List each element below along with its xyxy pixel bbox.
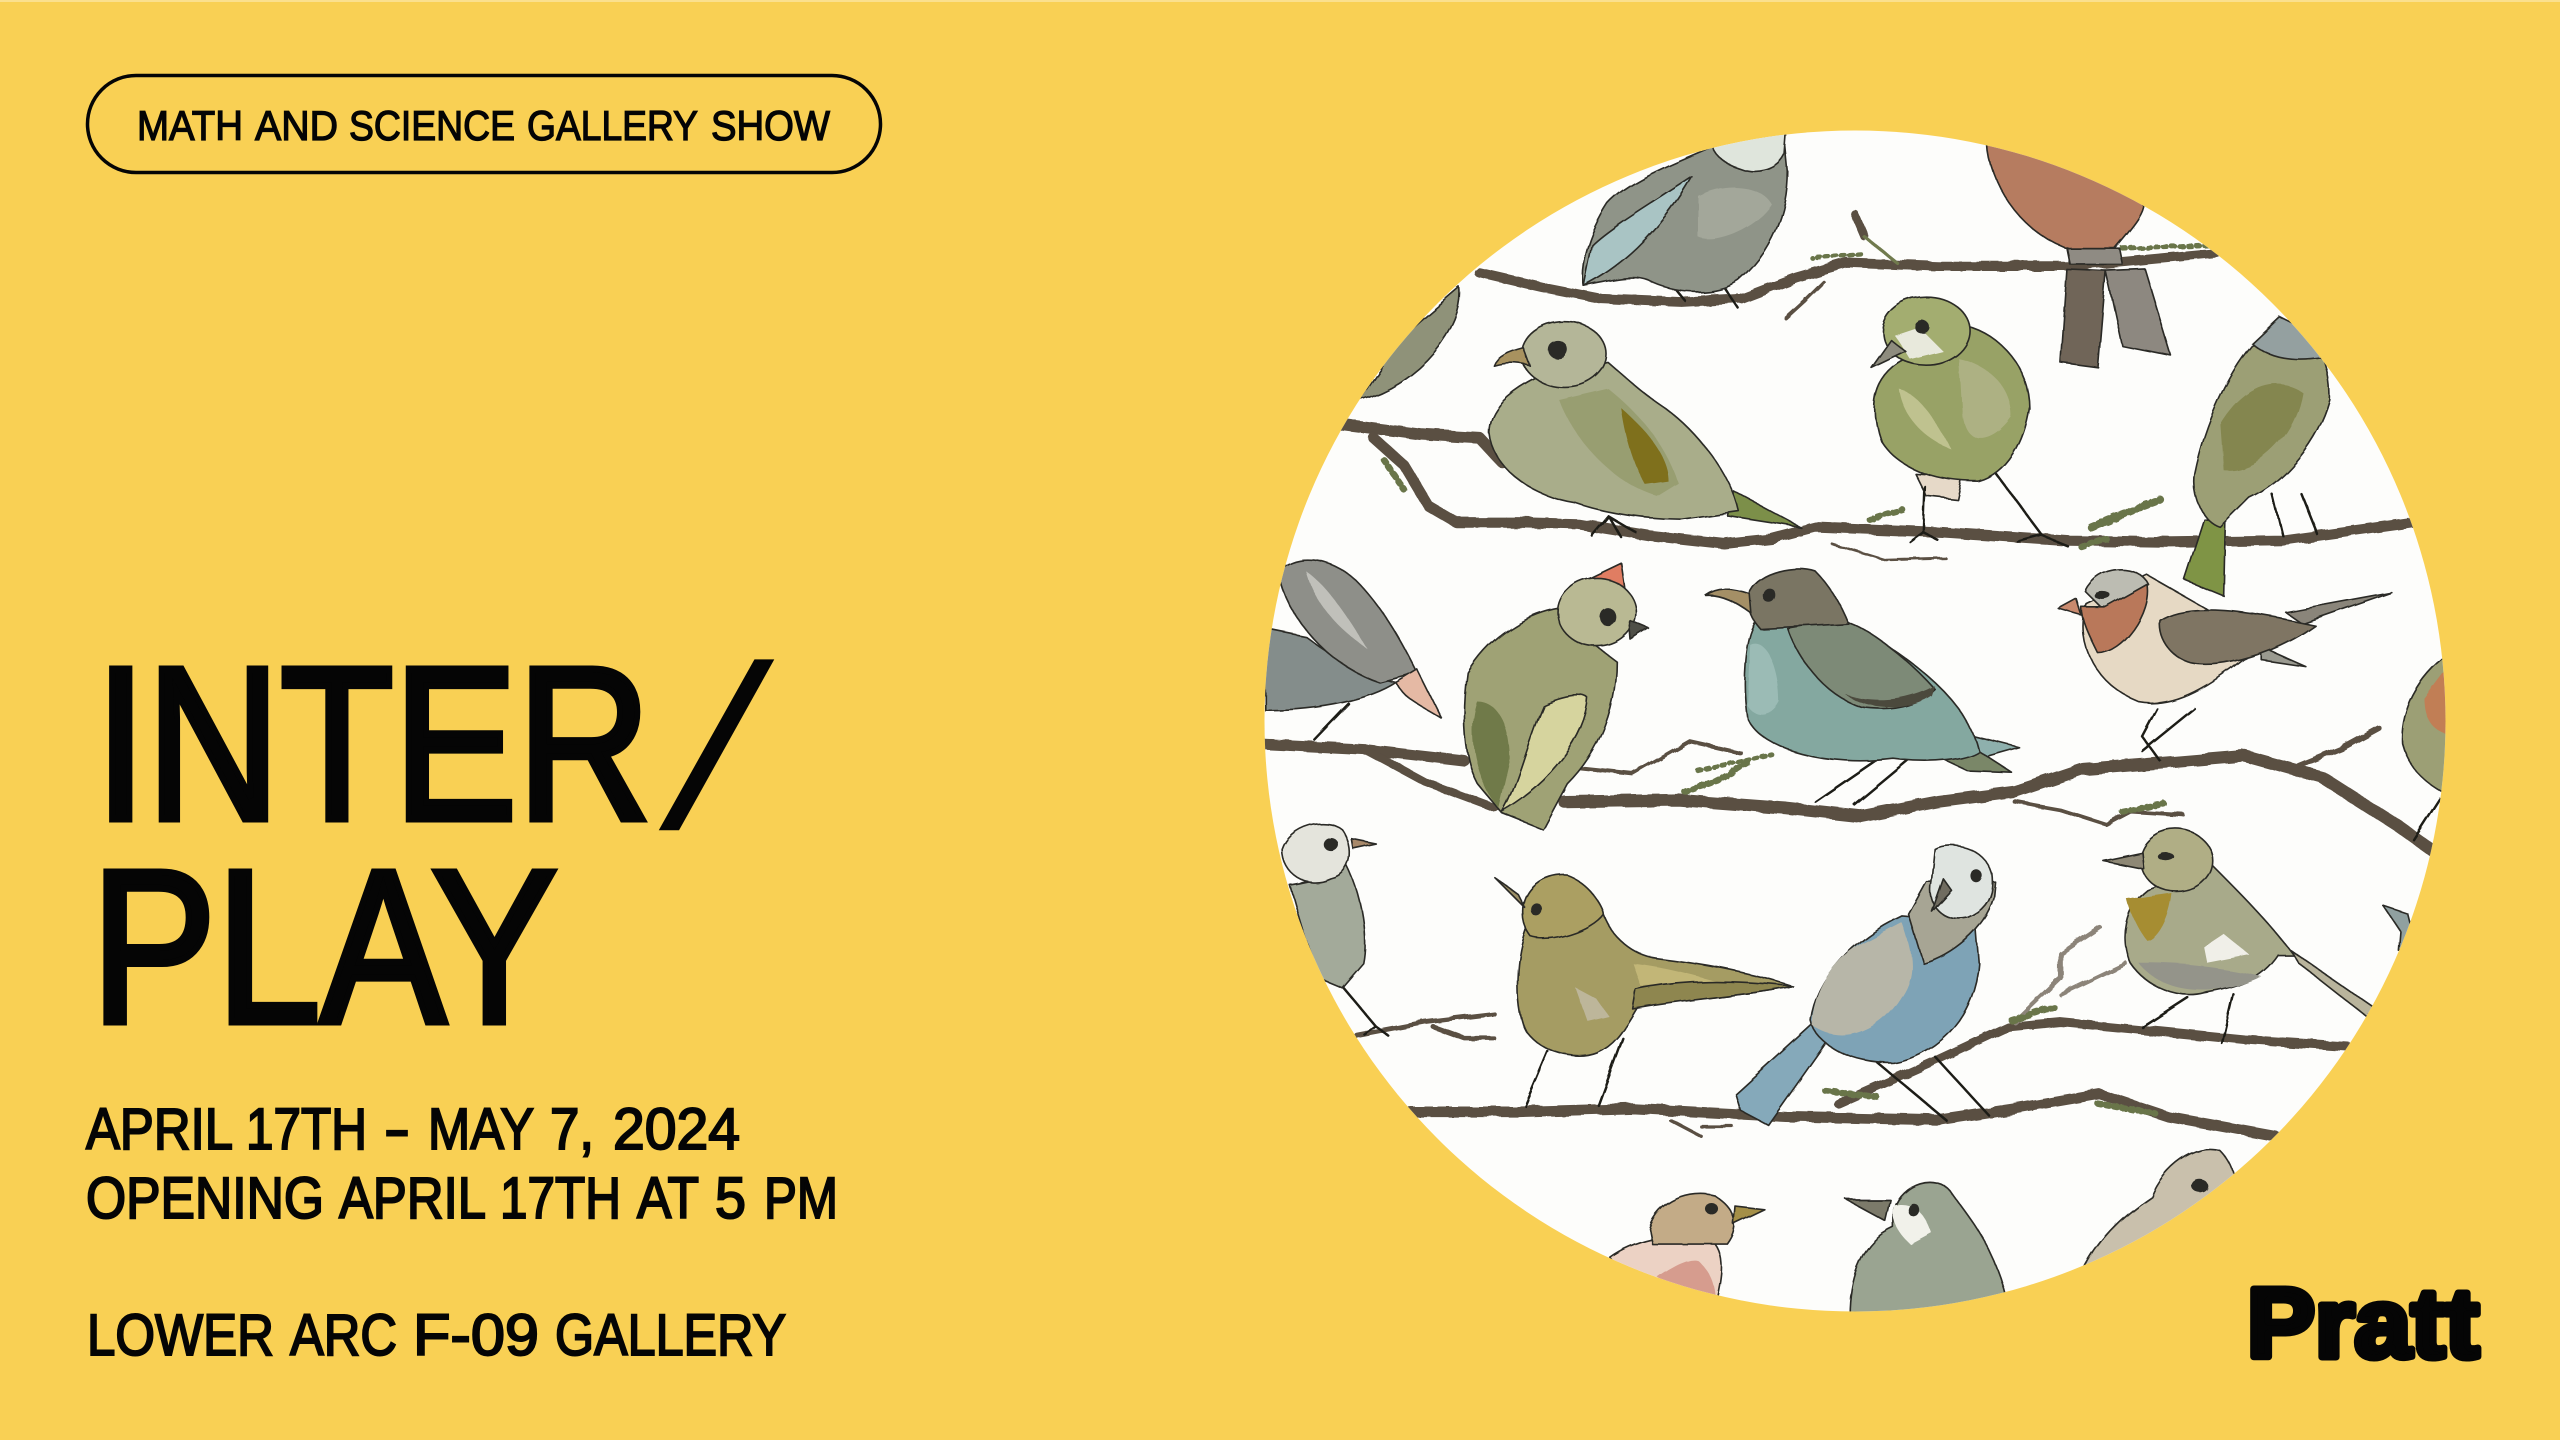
bird: yellow chest	[2103, 829, 2376, 1043]
bird: crested olive	[1464, 563, 1649, 829]
bird: dove	[1489, 322, 1801, 536]
event tag pill	[88, 76, 880, 172]
event tag pill: GALLERY	[527, 102, 698, 149]
event dates: PM	[764, 1166, 838, 1231]
event dates: AT	[637, 1166, 699, 1231]
bird: orange face finch	[2059, 569, 2392, 761]
title: PLAY	[91, 826, 557, 1069]
bird: grey green bottom	[1847, 1182, 2011, 1322]
title: /	[647, 619, 785, 876]
title: INTER	[95, 623, 651, 866]
event dates: 17TH	[246, 1097, 367, 1162]
bird: olive standing	[1494, 875, 1793, 1105]
bird: small right edge	[2384, 906, 2416, 950]
event dates: 17TH	[500, 1166, 621, 1231]
bird: robin top right	[1987, 144, 2171, 367]
gallery location: GALLERY	[555, 1303, 786, 1368]
circular bird illustration	[1264, 130, 2449, 1322]
event dates: APRIL	[339, 1166, 486, 1231]
title	[91, 619, 785, 1069]
event dates: -	[384, 1097, 410, 1162]
bird: partial upper left	[1360, 287, 1460, 400]
bird: tan bottom right	[2083, 1149, 2235, 1273]
bird: white head left	[1282, 823, 1388, 1035]
event dates: MAY	[428, 1097, 534, 1162]
event tag pill: AND	[255, 102, 338, 149]
bird: left grey	[1265, 560, 1442, 740]
event dates	[86, 1097, 838, 1231]
event dates: APRIL	[86, 1097, 233, 1162]
gallery location: LOWER	[87, 1303, 274, 1368]
bird: right olive with grey band	[2184, 317, 2330, 596]
event dates: 2024	[613, 1097, 740, 1162]
bird: top grey	[1583, 134, 1788, 307]
event tag pill: SHOW	[711, 102, 830, 149]
bird: partial right edge	[2402, 653, 2449, 839]
bird: green turned head	[1871, 297, 2067, 545]
bird: blue	[1736, 845, 1995, 1125]
event dates: OPENING	[86, 1166, 324, 1231]
gallery location	[87, 1303, 786, 1368]
event tag pill: MATH	[137, 102, 243, 149]
gallery location: ARC	[290, 1303, 397, 1368]
event tag pill: SCIENCE	[349, 102, 515, 149]
gallery location: F-09	[413, 1303, 539, 1368]
moss on branches	[1384, 245, 2212, 1113]
branches	[1265, 214, 2433, 1136]
Pratt logo: Pratt	[2247, 1268, 2479, 1378]
event dates: 7,	[550, 1097, 594, 1162]
event dates: 5	[715, 1166, 746, 1231]
bird: pink bottom	[1610, 1193, 1765, 1303]
bird: teal	[1706, 569, 2020, 805]
